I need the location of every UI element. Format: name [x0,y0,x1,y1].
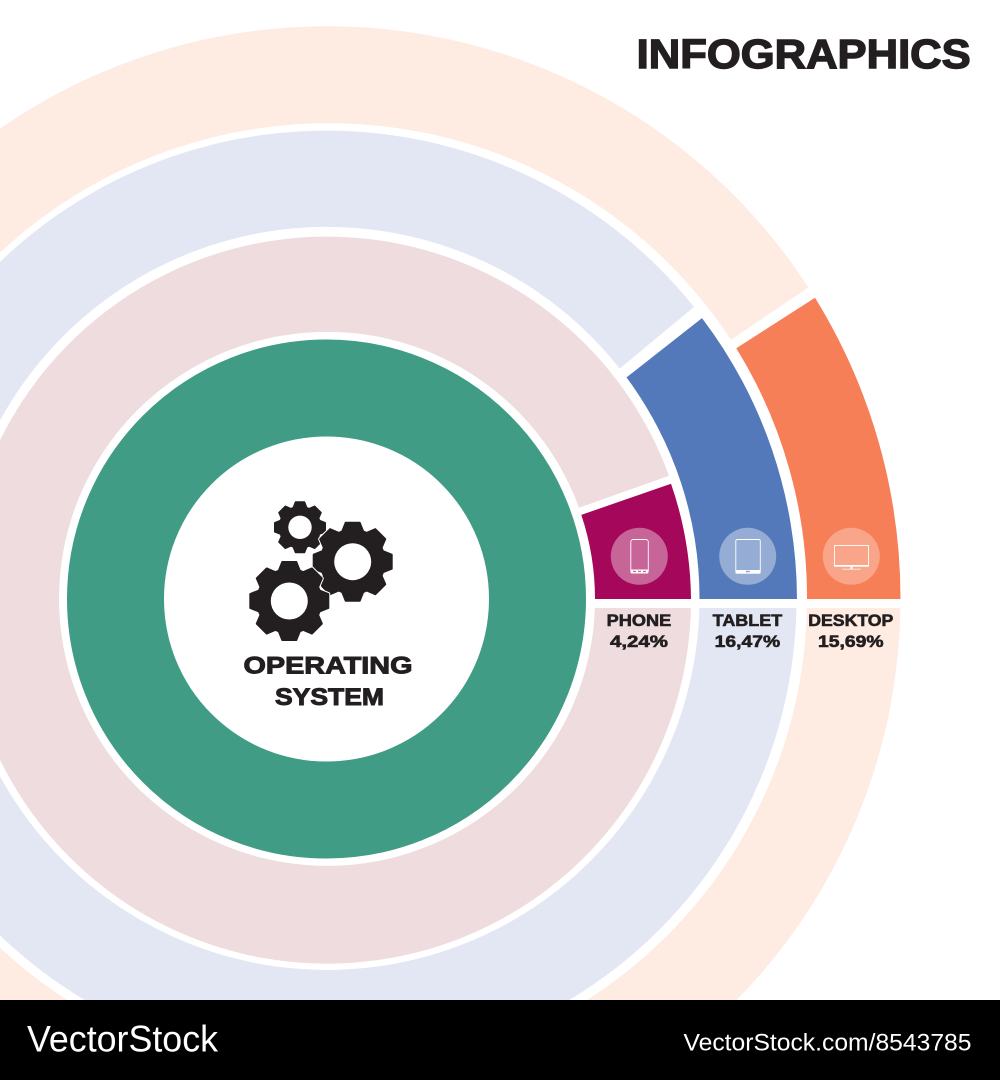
label: desktop: DESKTOP [808,612,894,630]
segment: tablet [626,318,797,599]
segment: phone [581,484,691,599]
icon: phone [611,528,668,585]
heading: operating system [244,652,412,711]
footer bar [0,1000,1000,1080]
heading: operating system: OPERATING [244,652,412,680]
icon: large right gear [314,523,392,601]
icon: small gear [275,502,325,553]
label: tablet [713,612,782,651]
footer: image id: VectorStock.com/8543785 [684,1030,972,1056]
label: phone: PHONE [607,612,671,630]
segment: desktop [736,298,901,599]
label: desktop [808,612,894,651]
pale ring: tablet remainder [0,131,796,1000]
footer: brand: VectorStock [27,1018,218,1060]
label: phone: 4,24% [610,633,668,651]
label: tablet: TABLET [713,612,782,630]
icon: gears [250,502,392,640]
heading: operating system: SYSTEM [275,684,384,711]
icon: desktop [823,528,880,585]
label: tablet: 16,47% [715,633,780,651]
label: phone [607,612,671,651]
label: desktop: 15,69% [818,633,884,651]
pale ring: phone remainder [0,237,691,964]
central ring: operating system [116,388,538,810]
icon: large left gear [250,562,328,640]
title: INFOGRAPHICS [637,31,971,77]
icon: tablet [719,528,776,585]
